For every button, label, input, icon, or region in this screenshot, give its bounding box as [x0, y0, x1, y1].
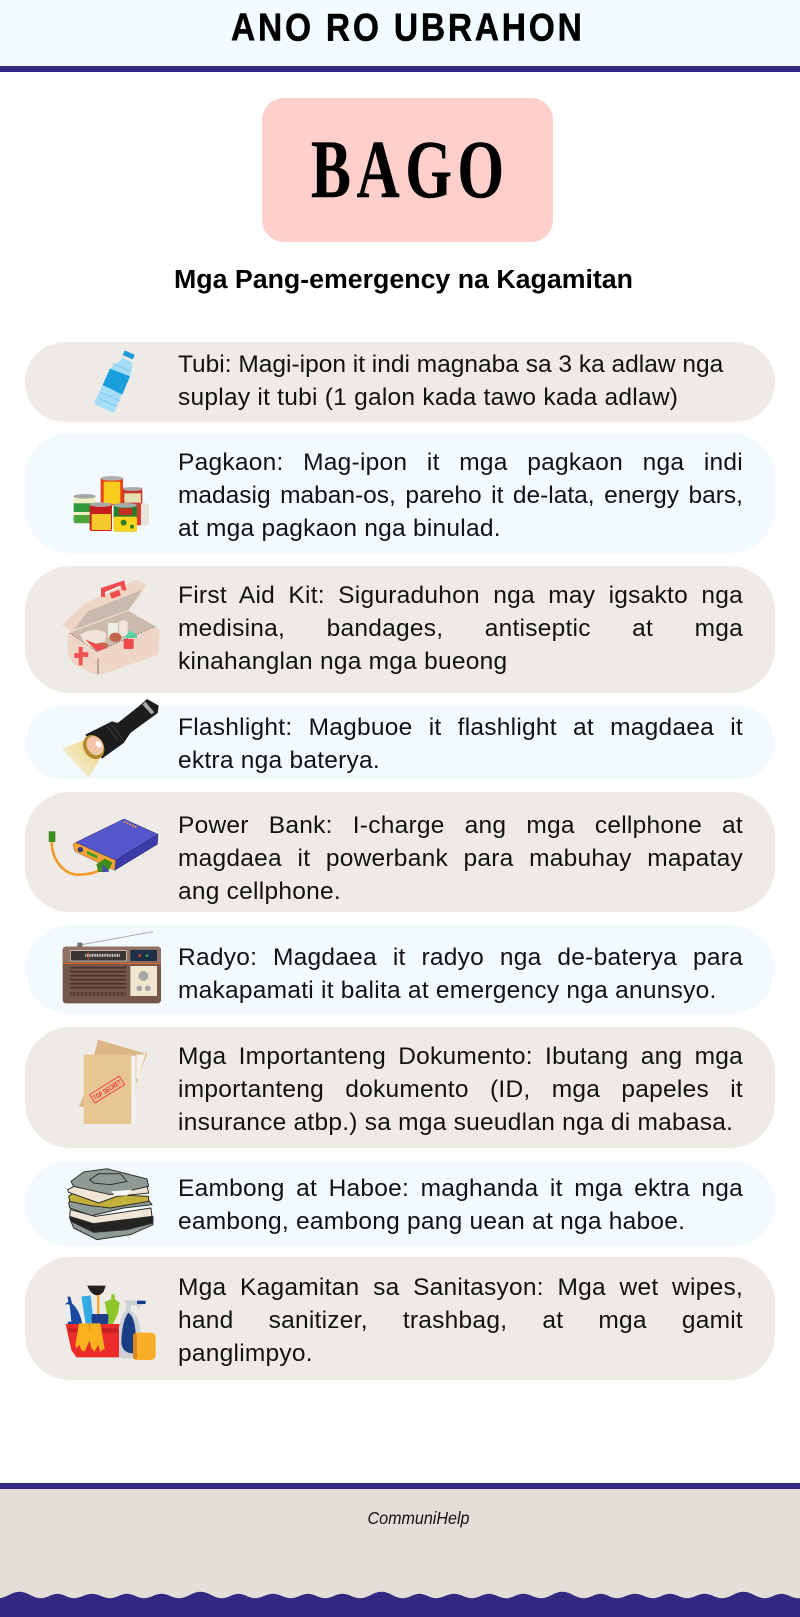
text: sanitation: Mga Kagamitan sa Sanitasyon: Mga wet wipes,: [178, 1274, 743, 1301]
text: power bank: Power Bank: I-charge ang mga cellphone at: [178, 812, 743, 839]
icon: flashlight: [62, 699, 159, 778]
text: water: [178, 351, 724, 411]
text: radio: [178, 944, 743, 1004]
icon: folded clothes: [67, 1168, 154, 1240]
icon: water bottle: [94, 350, 135, 412]
header band: [0, 0, 800, 72]
text: power bank: [178, 812, 743, 905]
text: power bank: ang cellphone.: [178, 878, 341, 905]
text: clothing: eambong, eambong pang uean at nga haboe.: [178, 1208, 685, 1235]
text: documents: importanteng dokumento (ID, mga papeles it: [178, 1076, 743, 1103]
panel: flashlight: [25, 706, 775, 779]
text: first aid kit: First Aid Kit: Siguraduhon nga may igsakto nga: [178, 582, 743, 609]
location badge: BAGO: [262, 98, 553, 242]
icon: canned goods: [74, 476, 149, 532]
footer: [0, 1483, 800, 1617]
text: radio: Radyo: Magdaea it radyo nga de-baterya para: [178, 944, 743, 971]
text: flashlight: [178, 714, 743, 774]
panel: clothing: [25, 1161, 775, 1246]
text: sanitation: panglimpyo.: [178, 1340, 313, 1367]
text: documents: [178, 1043, 743, 1136]
text: sanitation: [178, 1274, 743, 1367]
panel: first aid kit: [25, 566, 775, 693]
text: power bank: magdaea it powerbank para mabuhay mapatay: [178, 845, 743, 872]
panel: documents: [25, 1027, 775, 1148]
icon: document folder: TOP SECRET: [93, 1079, 124, 1102]
text: sanitation: hand sanitizer, trashbag, at mga gamit: [178, 1307, 743, 1334]
text: radio: makapamati it balita at emergency nga anunsyo.: [178, 977, 717, 1004]
panel: water: [25, 342, 775, 422]
text: food: madasig maban-os, pareho it de-lata, energy bars,: [178, 482, 743, 509]
text: clothing: Eambong at Haboe: maghanda it mga ektra nga: [178, 1175, 743, 1202]
subtitle: Mga Pang-emergency na Kagamitan: [174, 266, 633, 294]
panel: sanitation: [25, 1257, 775, 1380]
icon: document folder: [79, 1040, 147, 1124]
text: clothing: [178, 1175, 743, 1235]
text: water: Tubi: Magi-ipon it indi magnaba sa 3 ka adlaw nga: [178, 351, 723, 378]
text: documents: insurance atbp.) sa mga sueudlan nga di mabasa.: [178, 1109, 733, 1136]
text: first aid kit: medisina, bandages, antiseptic at mga: [178, 615, 743, 642]
text: water: suplay it tubi (1 galon kada tawo kada adlaw): [178, 384, 678, 411]
text: documents: Mga Importanteng Dokumento: Ibutang ang mga: [178, 1043, 743, 1070]
text: food: [178, 449, 743, 542]
text: food: Pagkaon: Mag-ipon it mga pagkaon nga indi: [178, 449, 743, 476]
panel: radio: [25, 925, 775, 1014]
footer wave: [0, 1592, 800, 1617]
text: flashlight: Flashlight: Magbuoe it flashlight at magdaea it: [178, 714, 743, 741]
panel: food: [25, 433, 775, 553]
text: flashlight: ektra nga baterya.: [178, 747, 380, 774]
icon: first aid kit: [62, 580, 160, 676]
text: first aid kit: [178, 582, 743, 675]
text: food: at mga pagkaon nga binulad.: [178, 515, 501, 542]
panel: power bank: [25, 792, 775, 912]
icon: power bank: [48, 818, 158, 876]
icon: cleaning supplies: [65, 1286, 156, 1360]
icon: radio: [62, 931, 162, 1004]
text: first aid kit: kinahanglan nga mga bueong: [178, 648, 507, 675]
